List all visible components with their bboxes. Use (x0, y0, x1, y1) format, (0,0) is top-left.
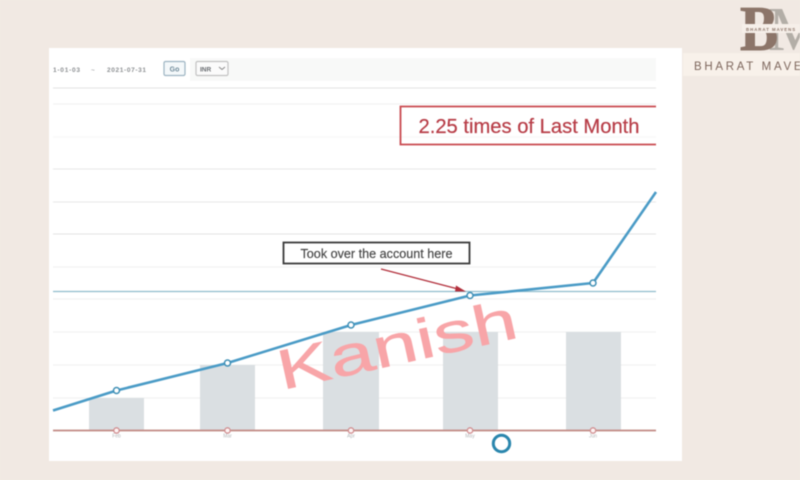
reference line (53, 290, 656, 292)
logo wordmark band (683, 53, 800, 76)
callout: took over the account (284, 242, 470, 264)
watermark: Kanish: Kanish (271, 287, 523, 402)
callout: 2.25 times of last month (400, 106, 656, 144)
toolbar: date range and currency: INR (200, 66, 212, 74)
baseline with markers (53, 428, 656, 440)
logo: Bharat Mavens monogram: BHARAT MAVENS (746, 27, 796, 32)
toolbar: date range and currency: Go (170, 66, 179, 74)
callout: took over the account: Took over the account here (300, 247, 453, 261)
baseline with markers: May (465, 434, 475, 440)
icon: blue ring (493, 435, 510, 452)
line chart (53, 192, 656, 410)
arrow: to takeover point (381, 269, 466, 292)
bar chart (89, 332, 621, 431)
toolbar: date range and currency: ~ (91, 67, 95, 74)
baseline with markers: Feb (112, 434, 121, 440)
baseline with markers: Mar (223, 434, 232, 440)
toolbar: date range and currency (53, 58, 656, 81)
callout: 2.25 times of last month: 2.25 times of Last Month (418, 115, 640, 138)
panel: chart screenshot (49, 48, 682, 461)
baseline with markers: Jun (589, 434, 597, 440)
toolbar: date range and currency: 1-01-03 (53, 67, 80, 74)
baseline with markers: Apr (347, 434, 355, 440)
toolbar: date range and currency: 2021-07-31 (107, 67, 146, 74)
